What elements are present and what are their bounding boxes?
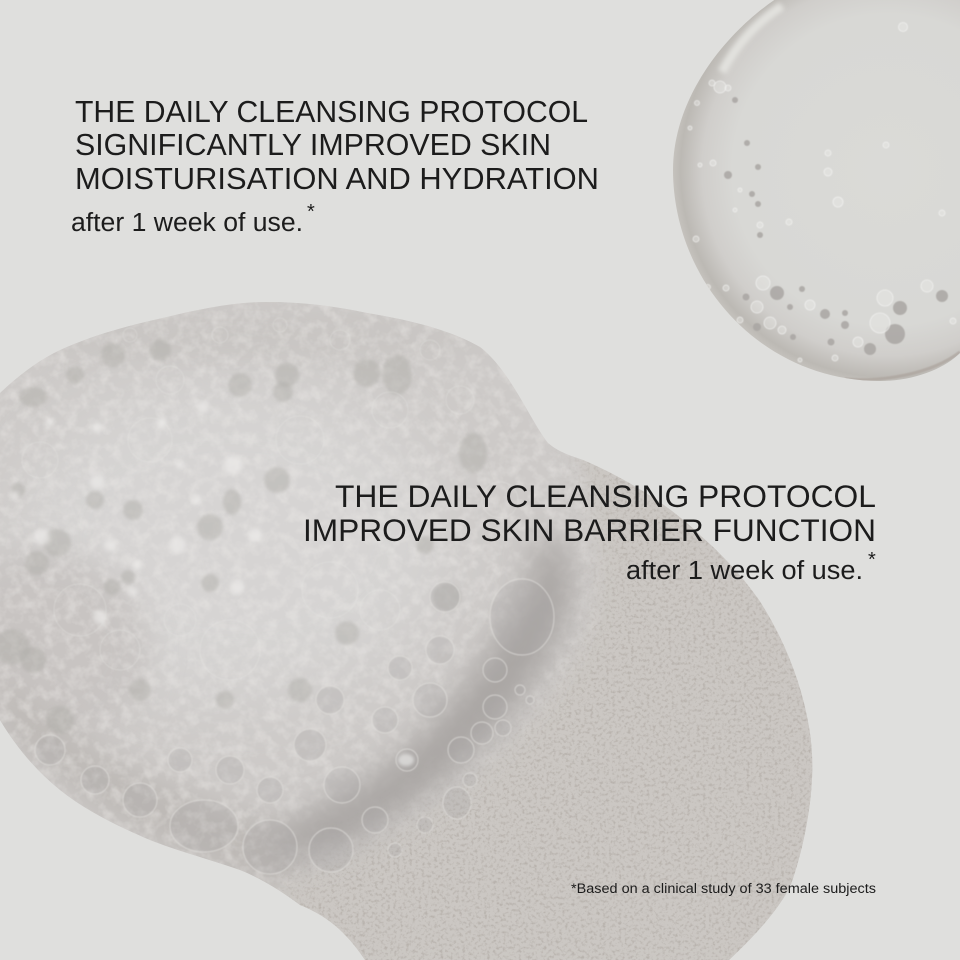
bright bubble glint [398,754,414,766]
heading: barrier function claim [303,478,876,548]
droplet highlight [722,6,782,72]
droplet bubbles [688,22,956,362]
footnote: *Based on a clinical study of 33 female subjects [571,881,876,896]
serum droplet [673,0,960,381]
gel tone [296,464,812,960]
highlights [11,401,262,624]
subtext: second claim: * [868,549,876,571]
foam and gel swatch [0,290,840,960]
heading: barrier function claim: THE DAILY CLEANSING PROTOCOL [335,478,876,514]
heading: barrier function claim: IMPROVED SKIN BARRIER FUNCTION [303,512,876,548]
dark foam edge [262,530,572,856]
subtext: first claim: * [307,201,315,223]
bubble outlines [36,578,555,874]
heading: moisturisation claim [75,95,599,196]
gel grain [280,440,830,960]
subtext: second claim: after 1 week of use. [626,557,863,585]
subtext: second claim [626,549,876,585]
heading: moisturisation claim: SIGNIFICANTLY IMPROVED SKIN [75,128,551,162]
dark bubbles [0,339,487,734]
heading: moisturisation claim: MOISTURISATION AND HYDRATION [75,162,599,196]
foam tone [0,406,420,888]
subtext: first claim: after 1 week of use. [71,209,303,237]
heading: moisturisation claim: THE DAILY CLEANSING PROTOCOL [75,95,588,129]
